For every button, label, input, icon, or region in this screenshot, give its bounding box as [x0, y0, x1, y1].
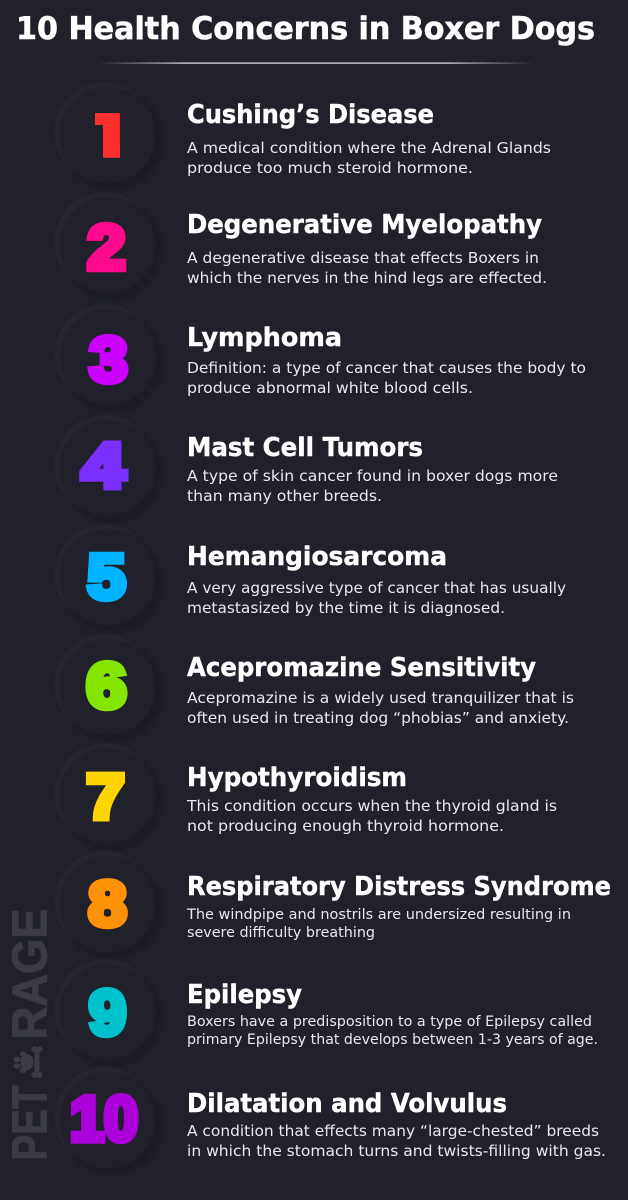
description 1: [187, 139, 551, 177]
number badge 9: 9: [89, 978, 126, 1048]
description 4: [187, 467, 558, 505]
heading 9: Epilepsy: [187, 980, 302, 1010]
item 9: Epilepsy: [54, 959, 598, 1067]
heading 7: Hypothyroidism: [187, 763, 407, 793]
number badge 4: 4: [82, 432, 125, 502]
number badge 4: [54, 415, 162, 523]
number badge 3: [55, 304, 163, 412]
description 7: This condition occurs when the thyroid gland is: [186, 797, 557, 815]
item 4: Mast Cell Tumors: [54, 415, 558, 523]
description 8: The windpipe and nostrils are undersized resulting in: [186, 906, 571, 923]
description 6: often used in treating dog “phobias” and anxiety.: [187, 709, 569, 727]
number badge 10: 10: [70, 1084, 138, 1154]
item 5: Hemangiosarcoma: [54, 524, 566, 632]
number badge 8: 8: [88, 870, 126, 940]
number badge 2: 2: [88, 213, 126, 283]
heading 6: Acepromazine Sensitivity: [187, 653, 536, 683]
number badge 1: [95, 113, 120, 158]
description 7: [186, 797, 557, 835]
number badge 10: [54, 1067, 162, 1175]
title: 10 Health Concerns in Boxer Dogs: [16, 11, 595, 47]
number badge 9: [54, 959, 162, 1067]
description 9: [187, 1013, 598, 1048]
heading 4: Mast Cell Tumors: [187, 433, 423, 463]
heading 8: Respiratory Distress Syndrome: [187, 872, 611, 902]
description 2: [187, 249, 547, 287]
description 3: produce abnormal white blood cells.: [187, 379, 473, 397]
watermark logo: PET RAGE: [4, 908, 58, 1160]
heading 1: Cushing’s Disease: [187, 100, 434, 130]
description 7: not producing enough thyroid hormone.: [187, 817, 504, 835]
item 3: Lymphoma: [55, 304, 586, 412]
description 10: in which the stomach turns and twists-filling with gas.: [187, 1142, 606, 1160]
number badge 1: 1: [88, 98, 130, 168]
heading 2: Degenerative Myelopathy: [187, 210, 542, 240]
heading 10: Dilatation and Volvulus: [187, 1089, 507, 1119]
icon: paw and bone: [14, 1046, 42, 1078]
description 9: Boxers have a predisposition to a type of Epilepsy called: [187, 1013, 592, 1030]
description 5: metastasized by the time it is diagnosed.: [187, 599, 505, 617]
item 7: Hypothyroidism: [54, 743, 557, 851]
description 9: primary Epilepsy that develops between 1-3 years of age.: [187, 1031, 598, 1048]
description 2: A degenerative disease that effects Boxers in: [187, 249, 539, 267]
number badge 5: [54, 524, 162, 632]
description 1: A medical condition where the Adrenal Glands: [187, 139, 551, 157]
description 4: A type of skin cancer found in boxer dogs more: [187, 467, 558, 485]
description 10: A condition that effects many “large-chested” breeds: [187, 1122, 599, 1140]
item 1: Cushing's Disease: [95, 103, 550, 176]
description 10: [187, 1122, 606, 1160]
description 5: A very aggressive type of cancer that has usually: [187, 579, 566, 597]
description 8: severe difficulty breathing: [187, 924, 375, 941]
description 8: [186, 906, 571, 941]
number badge 6: 6: [86, 652, 126, 722]
description 6: Acepromazine is a widely used tranquilizer that is: [187, 689, 574, 707]
heading 3: Lymphoma: [187, 323, 342, 353]
description 6: [187, 689, 574, 727]
description 1: produce too much steroid hormone.: [187, 159, 473, 177]
item 6: Acepromazine Sensitivity: [54, 634, 574, 742]
watermark logo: PET RAGE: RAGE: [4, 908, 58, 1040]
heading 5: Hemangiosarcoma: [187, 542, 447, 572]
watermark logo: PET RAGE: PET: [4, 1085, 58, 1160]
number badge 8: [54, 851, 162, 959]
number badge 6: [54, 634, 162, 742]
number badge 7: [54, 743, 162, 851]
description 5: [187, 579, 566, 617]
number badge 7: 7: [86, 762, 124, 832]
number badge 5: 5: [88, 542, 126, 612]
number badge 3: 3: [90, 326, 128, 396]
description 3: [187, 359, 586, 397]
item 8: Respiratory Distress Syndrome: [54, 851, 611, 959]
number badge 2: [54, 192, 162, 300]
item 2: Degenerative Myelopathy: [54, 192, 547, 300]
description 4: than many other breeds.: [187, 487, 382, 505]
description 2: which the nerves in the hind legs are effected.: [187, 269, 547, 287]
item 10: Dilatation and Volvulus: [54, 1067, 606, 1175]
description 3: Definition: a type of cancer that causes the body to: [187, 359, 586, 377]
